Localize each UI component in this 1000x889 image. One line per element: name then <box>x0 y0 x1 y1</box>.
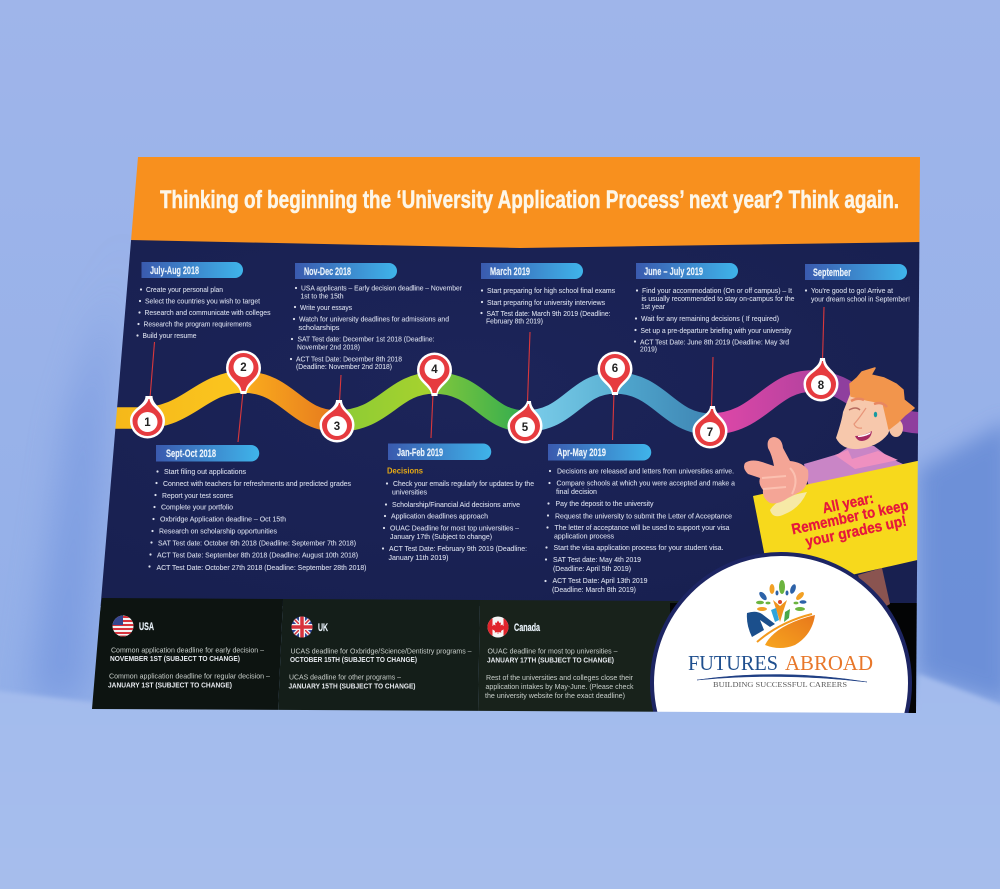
list: July-Aug 2018: Research the program requirements <box>144 320 252 328</box>
list: Jan-Feb 2019: Scholarship/Financial Aid decisions arrive <box>392 500 520 509</box>
panel: September <box>805 264 910 304</box>
logo underline swoosh <box>697 674 867 682</box>
list: March 2019: February 8th 2019) <box>486 316 543 326</box>
floor <box>0 674 1000 889</box>
list: June-July 2019: is usually recommended to stay on-campus for the <box>642 294 794 303</box>
list: Sept-Oct 2018: ACT Test Date: October 27th 2018 (Deadline: September 28th 2018) <box>156 563 366 572</box>
pin 8 <box>804 358 838 402</box>
pin 7: 7 <box>707 427 713 439</box>
list: Sept-Oct 2018: ACT Test Date: September 8th 2018 (Deadline: August 10th 2018) <box>157 550 358 560</box>
list: Nov-Dec 2018: ACT Test Date: December 8th 2018 <box>296 354 402 364</box>
panel: Sept-Oct 2018 <box>148 445 366 572</box>
list: March 2019: Start preparing for high school final exams <box>487 286 615 295</box>
list: Jan-Feb 2019: universities <box>392 488 427 496</box>
panel: March 2019 <box>480 263 615 326</box>
list: Nov-Dec 2018: USA applicants – Early decision deadline – November <box>301 284 462 292</box>
text: USA deadlines <box>108 646 271 690</box>
face <box>836 392 892 449</box>
navy body panel <box>90 238 925 606</box>
heading: USA: USA <box>139 621 154 633</box>
list: Jan-Feb 2019: January 17th (Subject to change) <box>390 532 492 541</box>
header pill: Sept-Oct 2018 <box>156 445 259 462</box>
list: Apr-May 2019: Pay the deposit to the university <box>556 499 654 508</box>
footer panel: Canada <box>478 600 925 714</box>
pin 8: 8 <box>818 380 825 392</box>
poster <box>92 157 920 713</box>
pin 4 <box>417 352 452 396</box>
list: Apr-May 2019: SAT Test date: May 4th 2019 <box>553 555 641 564</box>
list: Sept-Oct 2018: SAT Test date: October 6th 2018 (Deadline: September 7th 2018) <box>158 538 356 548</box>
list: Nov-Dec 2018: scholarships <box>298 323 340 332</box>
list: Apr-May 2019: The letter of acceptance will be used to support your visa <box>554 523 730 532</box>
pin 7 <box>692 406 728 448</box>
list: July-Aug 2018: Research and communicate with colleges <box>144 308 271 317</box>
text: Canada deadlines: OUAC deadline for most top universities – <box>488 646 618 656</box>
character: pointing man <box>804 368 914 502</box>
list: Jan-Feb 2019: Application deadlines approach <box>391 512 488 520</box>
list: Nov-Dec 2018: SAT Test date: December 1st 2018 (Deadline: <box>298 334 434 344</box>
logo circle <box>652 554 910 812</box>
header pill: Nov-Dec 2018: Nov-Dec 2018 <box>304 266 351 278</box>
list: March 2019: SAT Test date: March 9th 2019 (Deadline: <box>486 309 610 318</box>
pin 3 <box>320 400 354 442</box>
hair <box>850 368 914 429</box>
list: Sept-Oct 2018: Report your test scores <box>162 491 233 500</box>
list: Apr-May 2019: Request the university to submit the Letter of Acceptance <box>555 512 732 520</box>
nose <box>854 408 866 428</box>
list: June-July 2019 <box>634 286 794 354</box>
panel: Nov-Dec 2018 <box>290 263 462 371</box>
list: July-Aug 2018: Build your resume <box>142 331 196 340</box>
text: Canada deadlines: JANUARY 17TH (SUBJECT TO CHANGE) <box>487 656 615 664</box>
header pill: Sept-Oct 2018: Sept-Oct 2018 <box>166 448 216 460</box>
list: June-July 2019: Set up a pre-departure briefing with your university <box>640 326 792 335</box>
panel: July-Aug 2018 <box>136 262 271 340</box>
footer panel: UK <box>278 599 480 713</box>
list: June-July 2019: ACT Test Date: June 8th 2019 (Deadline: May 3rd <box>640 338 789 346</box>
list: Nov-Dec 2018: November 2nd 2018) <box>297 342 360 352</box>
panel: Apr-May 2019 <box>544 444 736 594</box>
pin 1 <box>130 396 165 438</box>
ear <box>889 419 903 437</box>
list: Jan-Feb 2019: Check your emails regularly for updates by the <box>393 479 534 488</box>
list: July-Aug 2018: Select the countries you wish to target <box>145 296 260 306</box>
pin 5: 5 <box>522 422 529 434</box>
header pill: Apr-May 2019 <box>548 444 651 460</box>
list: Apr-May 2019 <box>544 466 736 594</box>
logo tagline: BUILDING SUCCESSFUL CAREERS <box>713 681 847 689</box>
sign text: Remember to keep <box>790 497 910 538</box>
right poster shadow <box>918 420 1000 705</box>
list: Apr-May 2019: application process <box>554 532 614 540</box>
heading: UK: UK <box>318 622 328 634</box>
list: June-July 2019: 2019) <box>640 344 657 354</box>
text: UK deadlines: OCTOBER 15TH (SUBJECT TO CHANGE) <box>290 655 418 664</box>
logo wordmark <box>688 651 873 675</box>
sign text <box>790 490 910 551</box>
text: USA deadlines: Common application deadline for early decision – <box>111 646 265 654</box>
sign text: All year: <box>821 490 875 517</box>
sign text: your grades up! <box>804 513 908 551</box>
subheading: Decisions: Decisions <box>387 466 424 476</box>
list: Apr-May 2019: final decision <box>556 487 597 496</box>
pin 2 <box>226 350 261 394</box>
pin 1: 1 <box>144 417 151 429</box>
header pill: March 2019: March 2019 <box>490 266 530 278</box>
list: September: your dream school in September! <box>811 294 910 304</box>
black corner strip <box>670 603 925 714</box>
heading: Canada: Canada <box>514 622 541 634</box>
finger lines <box>762 468 796 494</box>
eyebrows <box>851 399 887 407</box>
sign post <box>858 568 890 615</box>
list: Apr-May 2019: Decisions are released and letters from universities arrive. <box>557 466 734 476</box>
list: June-July 2019: Find your accommodation (On or off campus) – It <box>642 286 792 295</box>
text: Canada deadlines: application intakes by May-June. (Please check <box>486 682 634 691</box>
list: Apr-May 2019: (Deadline: March 8th 2019) <box>552 585 636 594</box>
text: Canada deadlines: Rest of the universities and colleges close their <box>486 673 634 682</box>
header pill: July-Aug 2018: July-Aug 2018 <box>150 265 199 277</box>
list: Jan-Feb 2019 <box>382 479 534 562</box>
panel: Jan-Feb 2019 <box>382 444 534 562</box>
icon: USA flag <box>112 615 134 638</box>
list: Nov-Dec 2018: Watch for university deadlines for admissions and <box>299 314 449 324</box>
list: Jan-Feb 2019: OUAC Deadline for most top universities – <box>390 524 520 532</box>
yellow sign <box>753 460 922 615</box>
logo swoosh <box>757 614 812 642</box>
logo tree <box>747 580 815 648</box>
list: July-Aug 2018: Create your personal plan <box>146 285 223 294</box>
text: UK deadlines <box>288 646 472 690</box>
text: USA deadlines: Common application deadline for regular decision – <box>109 672 271 680</box>
eyes <box>849 408 860 410</box>
header pill: Jan-Feb 2019: Jan-Feb 2019 <box>397 447 443 459</box>
header pill: Apr-May 2019: Apr-May 2019 <box>557 447 606 459</box>
pin 3: 3 <box>334 421 340 433</box>
list: Sept-Oct 2018: Oxbridge Application deadline – Oct 15th <box>160 514 286 524</box>
icon: UK flag <box>291 616 313 638</box>
logo road <box>747 612 775 637</box>
logo leaf <box>765 615 815 648</box>
list: March 2019 <box>480 286 615 326</box>
header pill: Nov-Dec 2018 <box>295 263 397 279</box>
logo wordmark: ABROAD <box>785 651 873 675</box>
footer panel: USA <box>85 598 283 712</box>
list: Sept-Oct 2018 <box>148 467 366 572</box>
list: Jan-Feb 2019: January 11th 2019) <box>388 553 448 562</box>
text: Canada deadlines: the university website for the exact deadline) <box>485 691 625 700</box>
icon: Canada flag <box>487 616 509 638</box>
text: UK deadlines: JANUARY 15TH (SUBJECT TO CHANGE) <box>288 682 416 690</box>
list: Apr-May 2019: Start the visa application process for your student visa. <box>554 543 724 552</box>
character: pointing hand <box>744 437 808 516</box>
list: Nov-Dec 2018 <box>290 284 462 371</box>
sign board <box>753 460 922 593</box>
shirt <box>804 446 905 502</box>
text: Canada deadlines <box>485 646 634 700</box>
logo wordmark: FUTURES <box>688 651 778 675</box>
text: UK deadlines: UCAS deadline for other programs – <box>289 672 402 682</box>
pin 6 <box>598 352 632 395</box>
list: Apr-May 2019: Compare schools at which you were accepted and make a <box>556 478 736 488</box>
mouth <box>855 431 872 441</box>
list: June-July 2019: 1st year <box>641 302 665 311</box>
text: USA deadlines: NOVEMBER 1ST (SUBJECT TO CHANGE) <box>110 654 241 663</box>
pin 2: 2 <box>240 362 247 374</box>
hand shadow on sign <box>770 492 807 516</box>
list: Nov-Dec 2018: (Deadline: November 2nd 2018) <box>296 362 392 371</box>
list: March 2019: Start preparing for university interviews <box>487 298 605 307</box>
hand <box>744 437 808 503</box>
pin 6: 6 <box>612 363 618 375</box>
header pill: September: September <box>813 267 851 279</box>
connector lines <box>150 307 824 442</box>
shirt collar <box>835 450 898 469</box>
list: July-Aug 2018 <box>136 285 271 340</box>
list: Sept-Oct 2018: Complete your portfolio <box>161 502 233 512</box>
left poster shadow <box>30 230 130 700</box>
list: Nov-Dec 2018: 1st to the 15th <box>300 292 344 300</box>
list: Sept-Oct 2018: Connect with teachers for refreshments and predicted grades <box>163 479 351 488</box>
list: Apr-May 2019: (Deadline: April 5th 2019) <box>553 564 631 573</box>
logo figure <box>773 600 787 622</box>
list: September <box>804 288 910 303</box>
header pill: June-July 2019 <box>636 263 738 279</box>
pin 5 <box>508 401 542 444</box>
list: September: You're good to go! Arrive at <box>811 286 893 295</box>
panel: June-July 2019 <box>634 263 794 354</box>
text: USA deadlines: JANUARY 1ST (SUBJECT TO CHANGE) <box>108 680 233 690</box>
text: UK deadlines: UCAS deadline for Oxbridge/Science/Dentistry programs – <box>290 646 472 656</box>
list: Apr-May 2019: ACT Test Date: April 13th 2019 <box>552 576 648 585</box>
list: Jan-Feb 2019: ACT Test Date: February 9th 2019 (Deadline: <box>389 544 527 553</box>
orange header band <box>130 150 925 248</box>
list: Sept-Oct 2018: Start filing out applications <box>164 467 246 476</box>
timeline ribbon <box>100 381 925 424</box>
list: June-July 2019: Wait for any remaining decisions ( If required) <box>641 314 779 323</box>
header pill: Jan-Feb 2019 <box>388 444 491 460</box>
pin 4: 4 <box>431 364 438 376</box>
list: Sept-Oct 2018: Research on scholarship opportunities <box>159 526 277 536</box>
list: Nov-Dec 2018: Write your essays <box>300 303 352 312</box>
header pill: June-July 2019: June – July 2019 <box>644 266 703 278</box>
